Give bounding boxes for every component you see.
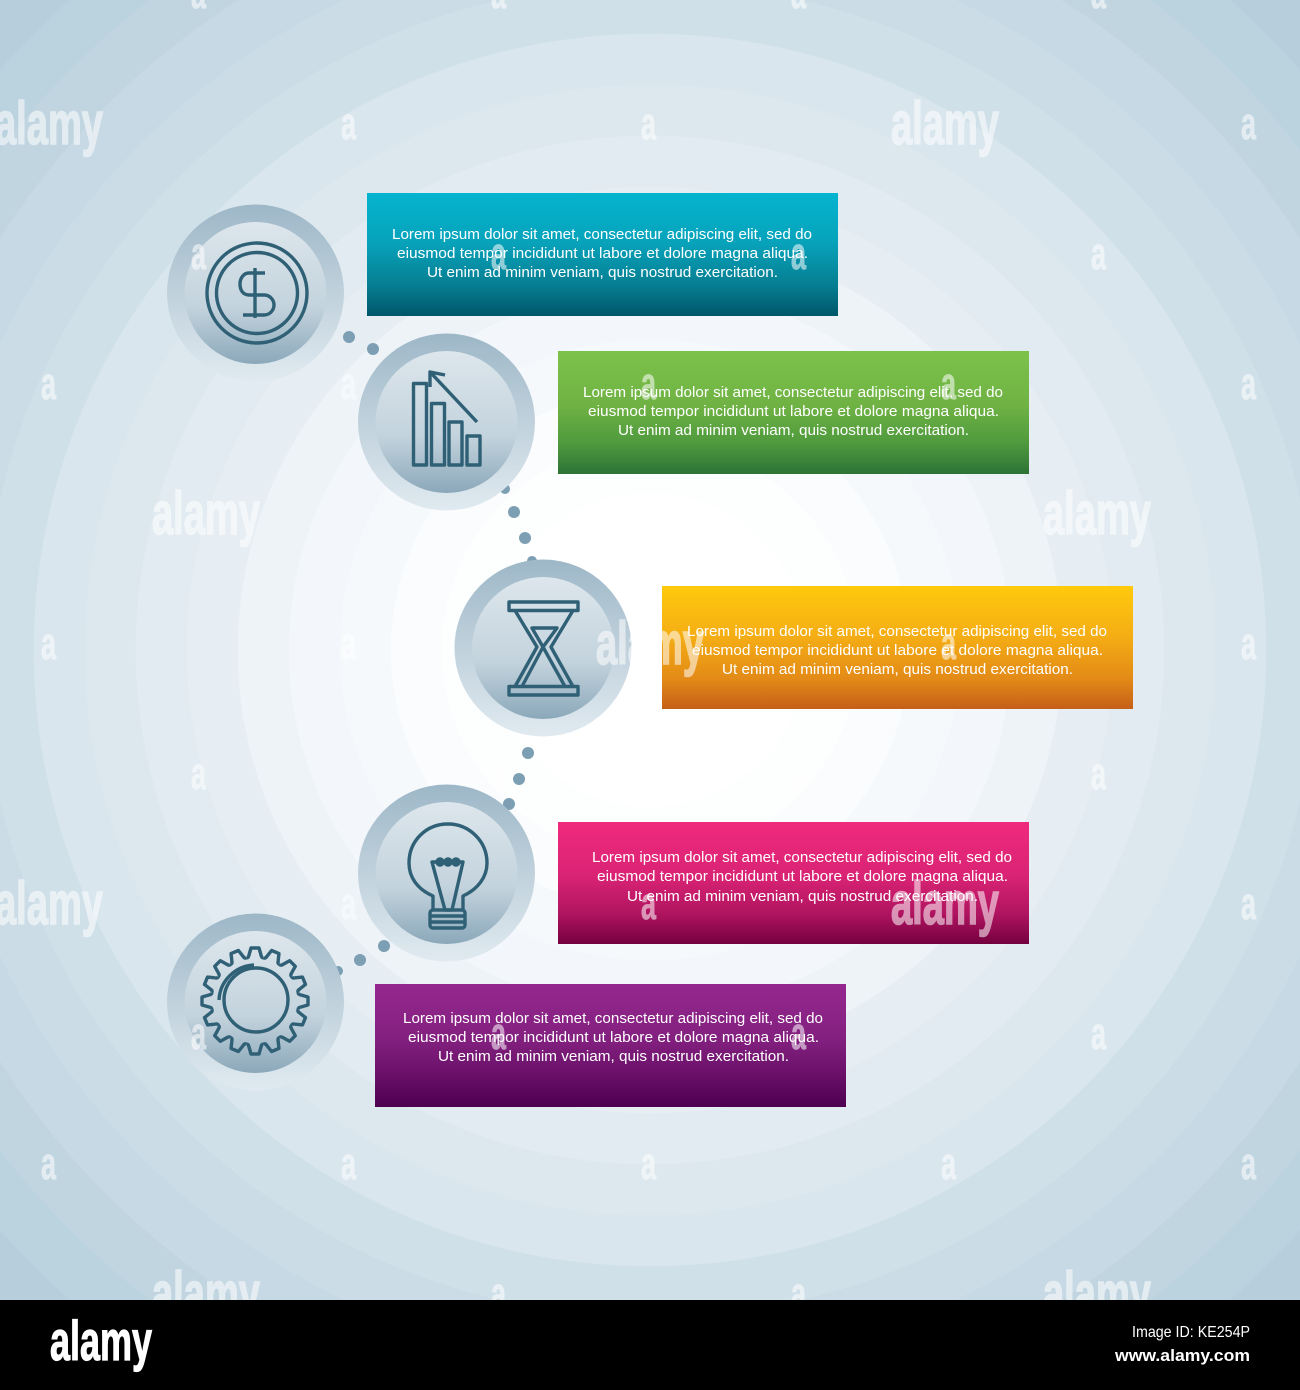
watermarks: a — [941, 618, 957, 669]
watermarks: alamy — [1043, 480, 1151, 547]
watermarks: a — [641, 878, 657, 929]
watermarks: a — [791, 228, 807, 279]
watermarks: alamy — [0, 90, 103, 157]
watermarks: a — [641, 358, 657, 409]
panel: purple text box: Lorem ipsum dolor sit amet, consectetur adipiscing elit, sed do — [403, 1010, 823, 1027]
watermarks: a — [491, 1008, 507, 1059]
panel: green text box: Lorem ipsum dolor sit amet, consectetur adipiscing elit, sed do — [583, 384, 1003, 401]
image id: Image ID: KE254P — [1132, 1324, 1250, 1341]
watermarks: a — [341, 98, 357, 149]
watermarks: a — [1241, 98, 1257, 149]
watermarks: a — [41, 358, 57, 409]
watermarks: alamy — [891, 90, 999, 157]
panel: orange text box: Lorem ipsum dolor sit amet, consectetur adipiscing elit, sed do — [687, 623, 1107, 640]
watermarks: a — [1241, 878, 1257, 929]
watermarks: alamy — [1043, 1260, 1151, 1327]
step 1: dollar coin badge — [167, 204, 344, 382]
panel: teal text box — [367, 193, 838, 316]
watermarks: a — [1241, 1138, 1257, 1189]
watermarks: a — [1241, 358, 1257, 409]
panel: green text box — [558, 351, 1029, 474]
watermarks: a — [791, 1008, 807, 1059]
panel: purple text box: Ut enim ad minim veniam, quis nostrud exercitation. — [438, 1048, 789, 1065]
watermarks: a — [941, 358, 957, 409]
step 3: hourglass badge — [454, 560, 632, 736]
watermarks: a — [491, 748, 507, 799]
step 5: gear badge — [167, 914, 344, 1090]
watermarks: a — [41, 618, 57, 669]
watermarks: a — [1091, 1008, 1107, 1059]
panel: green text box: Ut enim ad minim veniam, quis nostrud exercitation. — [618, 422, 969, 439]
watermarks: a — [791, 1268, 807, 1319]
icon: bar chart with arrow — [414, 372, 480, 465]
watermarks: alamy — [596, 610, 704, 677]
panel: orange text box: Ut enim ad minim veniam, quis nostrud exercitation. — [722, 661, 1073, 678]
panel: teal text box: eiusmod tempor incididunt ut labore et dolore magna aliqua. — [397, 245, 808, 262]
watermarks: a — [641, 1138, 657, 1189]
watermarks: alamy — [891, 870, 999, 937]
panel: orange text box — [662, 586, 1133, 709]
watermarks: a — [491, 228, 507, 279]
watermarks: a — [941, 1138, 957, 1189]
watermarks: a — [191, 228, 207, 279]
watermarks: a — [1091, 748, 1107, 799]
watermarks: alamy — [152, 1260, 260, 1327]
watermarks: alamy — [152, 480, 260, 547]
icon: hourglass — [509, 602, 578, 695]
panel: orange text box: eiusmod tempor incididunt ut labore et dolore magna aliqua. — [692, 642, 1103, 659]
connector dots — [333, 331, 537, 976]
panel: purple text box: eiusmod tempor incididunt ut labore et dolore magna aliqua. — [408, 1029, 819, 1046]
icon: light bulb — [409, 824, 487, 928]
watermarks: a — [341, 878, 357, 929]
watermarks: a — [791, 748, 807, 799]
watermarks: a — [41, 1138, 57, 1189]
watermarks: a — [641, 98, 657, 149]
icon: dollar coin — [207, 243, 307, 343]
watermarks: a — [341, 618, 357, 669]
watermarks: alamy — [0, 870, 103, 937]
website: www.alamy.com — [1114, 1346, 1250, 1365]
footer logo: alamy — [50, 1309, 152, 1372]
panel: pink text box: Ut enim ad minim veniam, quis nostrud exercitation. — [627, 888, 978, 905]
watermarks: a — [341, 1138, 357, 1189]
watermarks: a — [341, 358, 357, 409]
step 4: light bulb badge — [358, 784, 535, 962]
footer bar — [0, 1300, 1300, 1390]
panel: purple text box — [375, 984, 846, 1107]
panel: teal text box: Lorem ipsum dolor sit amet, consectetur adipiscing elit, sed do — [392, 226, 812, 243]
watermarks: a — [491, 1268, 507, 1319]
panel: pink text box: Lorem ipsum dolor sit amet, consectetur adipiscing elit, sed do — [592, 849, 1012, 866]
step 2: bar chart badge — [358, 334, 535, 510]
panel: green text box: eiusmod tempor incididunt ut labore et dolore magna aliqua. — [588, 403, 999, 420]
panel: pink text box: eiusmod tempor incididunt ut labore et dolore magna aliqua. — [597, 868, 1008, 885]
watermarks: a — [191, 1008, 207, 1059]
watermarks: a — [1091, 228, 1107, 279]
watermarks: a — [1241, 618, 1257, 669]
icon: gear — [202, 948, 308, 1054]
panel: pink text box — [558, 822, 1029, 944]
watermarks: a — [191, 748, 207, 799]
panel: teal text box: Ut enim ad minim veniam, quis nostrud exercitation. — [427, 264, 778, 281]
